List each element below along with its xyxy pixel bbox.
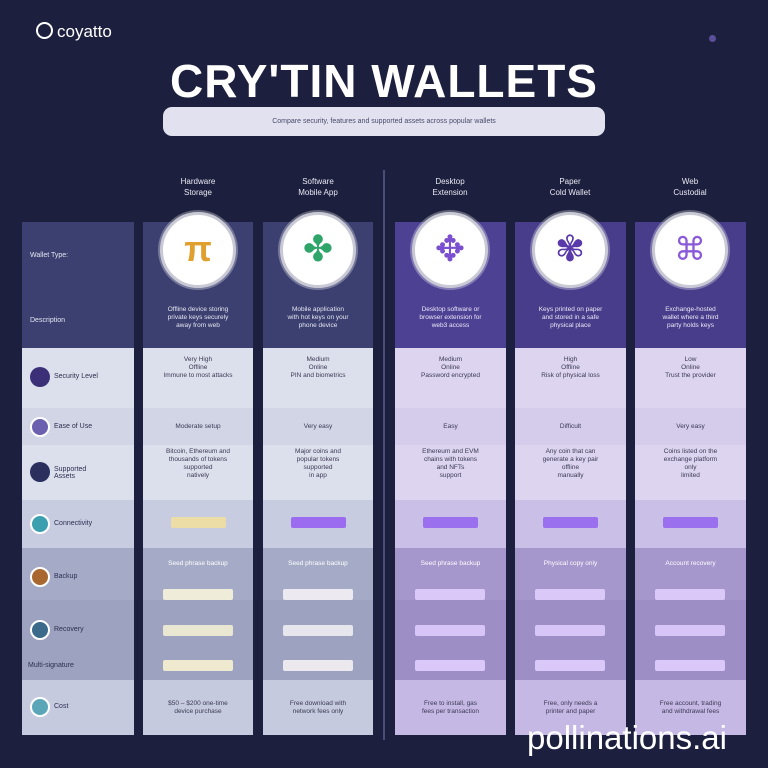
column: software: Major coins and: [295, 448, 341, 455]
column: web: ⌘: [674, 231, 706, 267]
column: paper: Any coin that can: [546, 448, 595, 455]
label column: Supported: [54, 466, 86, 473]
column: software: ✤: [303, 228, 333, 269]
column: web: party holds keys: [667, 322, 714, 329]
column: software: phone device: [299, 322, 337, 329]
column: paper: Free, only needs a: [544, 700, 597, 707]
column: paper: generate a key pair: [543, 456, 598, 463]
column: hardware: Offline device storing: [168, 306, 228, 313]
column: software: in app: [309, 472, 327, 479]
column: web: only: [685, 464, 696, 471]
column: hardware: $50 – $200 one-time: [168, 700, 228, 707]
column headers: Software: [302, 177, 334, 186]
column: web: Very easy: [676, 423, 705, 430]
column: paper: Risk of physical loss: [541, 372, 600, 379]
column: software: popular tokens: [297, 456, 339, 463]
column: web: Coins listed on the: [664, 448, 717, 455]
column: desktop: browser extension for: [419, 314, 482, 321]
divider: [383, 170, 385, 740]
column: desktop: and NFTs: [437, 464, 464, 471]
decorative dot: [709, 35, 716, 42]
column: desktop: Password encrypted: [421, 372, 480, 379]
label column: Wallet Type:: [30, 252, 68, 259]
label column: [22, 222, 134, 735]
column: hardware: private keys securely: [168, 314, 228, 321]
column: hardware: Moderate setup: [175, 423, 221, 430]
column: desktop: Medium: [439, 356, 462, 363]
column: desktop: fees per transaction: [422, 708, 479, 715]
column: paper: Physical copy only: [544, 560, 597, 567]
column: desktop: [395, 210, 506, 735]
column: desktop: ✥: [435, 228, 465, 269]
column headers: Extension: [432, 188, 468, 197]
column headers: Mobile App: [298, 188, 338, 197]
column headers: Web: [682, 177, 698, 186]
column: paper: Keys printed on paper: [539, 306, 602, 313]
column: hardware: [143, 210, 253, 735]
title: CRY'TIN WALLETS: [170, 55, 598, 107]
column: paper: Offline: [561, 364, 580, 371]
column: hardware: Immune to most attacks: [164, 372, 232, 379]
subtitle pill: [163, 107, 605, 136]
label column: Multi-signature: [28, 662, 74, 669]
column: hardware: supported: [184, 464, 212, 471]
label column: Cost: [54, 703, 68, 710]
column: paper: [515, 210, 626, 735]
column: desktop: Seed phrase backup: [421, 560, 480, 567]
column headers: Cold Wallet: [550, 188, 590, 197]
column headers: Paper: [559, 177, 581, 186]
label column: Backup: [54, 573, 77, 580]
column: software: Medium: [306, 356, 330, 363]
column: web: Low: [685, 356, 696, 363]
column: hardware: Offline: [189, 364, 207, 371]
column: web: Free account, trading: [660, 700, 721, 707]
column: software: Seed phrase backup: [288, 560, 348, 567]
column headers: Storage: [184, 188, 212, 197]
column: web: Exchange-hosted: [665, 306, 716, 313]
column: software: Free download with: [290, 700, 346, 707]
column: paper: physical place: [550, 322, 591, 329]
column headers: Hardware: [181, 177, 215, 186]
label column: Assets: [54, 473, 75, 480]
column: web: limited: [681, 472, 700, 479]
column: paper: offline: [562, 464, 579, 471]
column: desktop: Easy: [443, 423, 458, 430]
column: paper: printer and paper: [546, 708, 595, 715]
column: hardware: device purchase: [174, 708, 222, 715]
subtitle pill: Compare security, features and supported assets across popular wallets: [272, 118, 496, 125]
column: desktop: support: [440, 472, 461, 479]
column: web: exchange platform: [664, 456, 717, 463]
column: desktop: web3 access: [432, 322, 469, 329]
column: desktop: Desktop software or: [422, 306, 479, 313]
column: hardware: thousands of tokens: [169, 456, 227, 463]
column: desktop: Free to install, gas: [424, 700, 477, 707]
column: software: Online: [309, 364, 327, 371]
column: web: Online: [681, 364, 700, 371]
column: software: with hot keys on your: [287, 314, 349, 321]
column: paper: ✾: [555, 228, 585, 269]
column: software: network fees only: [293, 708, 343, 715]
column: desktop: Ethereum and EVM: [422, 448, 479, 455]
column: hardware: π: [184, 228, 212, 269]
column: web: wallet where a third: [662, 314, 718, 321]
column: software: PIN and biometrics: [291, 372, 345, 379]
column: hardware: natively: [187, 472, 209, 479]
label column: Security Level: [54, 373, 98, 380]
column: paper: Difficult: [560, 423, 581, 430]
column: hardware: away from web: [176, 322, 220, 329]
column: web: and withdrawal fees: [662, 708, 719, 715]
column: hardware: Bitcoin, Ethereum and: [166, 448, 230, 455]
column: paper: manually: [557, 472, 584, 479]
column headers: Custodial: [673, 188, 707, 197]
column headers: Desktop: [435, 177, 465, 186]
column: software: Mobile application: [292, 306, 344, 313]
column: desktop: Online: [441, 364, 460, 371]
column: paper: and stored in a safe: [542, 314, 599, 321]
column: web: Trust the provider: [665, 372, 716, 379]
label column: Connectivity: [54, 520, 92, 527]
label column: Description: [30, 317, 65, 324]
column: hardware: Very High: [184, 356, 212, 363]
watermark: pollinations.ai: [527, 719, 727, 756]
column: web: [635, 210, 746, 735]
column: web: Account recovery: [665, 560, 716, 567]
label column: Ease of Use: [54, 423, 92, 430]
label column: Recovery: [54, 626, 84, 633]
column: desktop: chains with tokens: [424, 456, 477, 463]
column headers: [181, 177, 707, 197]
column: paper: High: [564, 356, 577, 363]
column: software: supported: [304, 464, 332, 471]
column: hardware: Seed phrase backup: [168, 560, 228, 567]
column: software: Very easy: [304, 423, 332, 430]
logo: coyatto: [57, 22, 112, 41]
column: software: [263, 210, 373, 735]
